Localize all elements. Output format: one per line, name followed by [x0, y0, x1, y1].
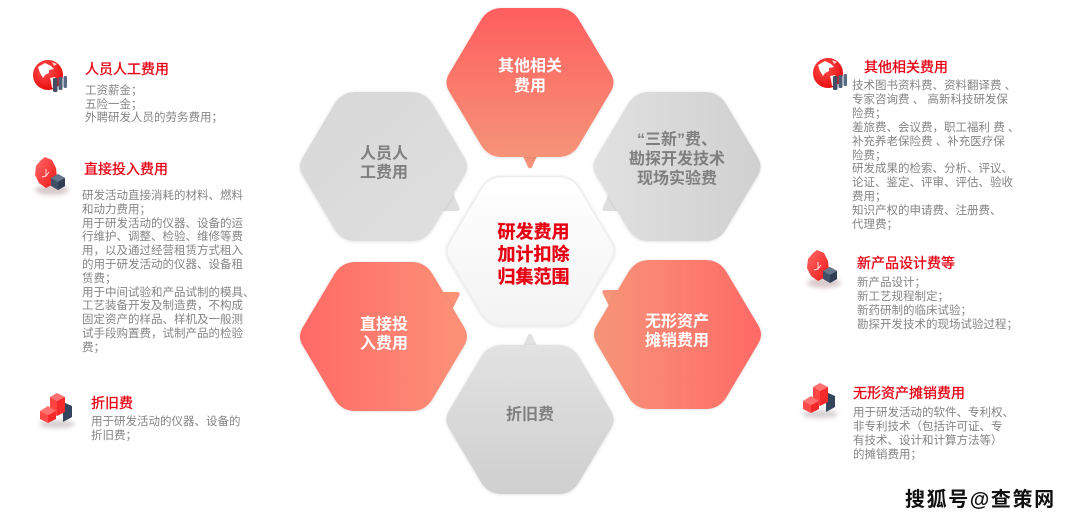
- hexagon: 人员人工费用: [300, 92, 467, 241]
- text block: 直接投入费用: 和动力费用；: [82, 204, 151, 216]
- text block: 人员人工费用: 人员人工费用: [85, 61, 169, 77]
- center hexagon: 研发费用加计扣除归集范围: 加计扣除: [498, 244, 570, 264]
- icon: globe right: [813, 58, 847, 90]
- hexagon: 其他相关费用: 费用: [514, 77, 546, 95]
- hexagon: 无形资产摊销费用: 摊销费用: [645, 330, 709, 350]
- center hexagon: 研发费用加计扣除归集范围: 归集范围: [498, 267, 570, 287]
- hexagon: 直接投入费用: [300, 262, 467, 411]
- text block: 人员人工费用: [85, 61, 223, 124]
- text block: 直接投入费用: 试手段购置费，试制产品的检验: [82, 328, 243, 340]
- text block: 其他相关费用: 其他相关费用: [864, 59, 948, 75]
- text block: 直接投入费用: 用于中间试验和产品试制的模具、: [82, 287, 254, 299]
- hexagon: 无形资产摊销费用: [594, 260, 761, 409]
- text block: 直接投入费用: 费；: [82, 342, 105, 354]
- text block: 新产品设计费等: 新产品设计费等: [857, 255, 955, 271]
- hexagon: 其他相关费用: [446, 8, 614, 168]
- hexagon: 折旧费: [446, 334, 614, 494]
- text block: 直接投入费用: 直接投入费用: [84, 161, 168, 177]
- hexagon: 折旧费: 折旧费: [506, 406, 554, 424]
- text block: 其他相关费用: 补充养老保险费 、补充医疗保: [852, 136, 1005, 148]
- text block: 直接投入费用: 赁费；: [82, 273, 116, 285]
- text block: 无形资产摊销费用: 无形资产摊销费用: [853, 385, 965, 401]
- text block: 直接投入费用: 行维护、调整、检验、维修等费: [82, 231, 243, 243]
- text block: 无形资产摊销费用: [853, 385, 1014, 461]
- text block: 人员人工费用: 工资薪金；: [85, 85, 142, 97]
- text block: 人员人工费用: 外聘研发人员的劳务费用；: [85, 112, 223, 124]
- text block: 无形资产摊销费用: 用于研发活动的软件、专利权、: [853, 407, 1014, 419]
- text block: 无形资产摊销费用: 的摊销费用；: [853, 449, 922, 461]
- text block: 折旧费: 折旧费: [91, 395, 133, 411]
- text block: 其他相关费用: 代理费；: [852, 219, 898, 231]
- text block: 折旧费: 折旧费；: [91, 430, 137, 442]
- icon: boxes left: [39, 393, 75, 428]
- text block: 人员人工费用: 五险一金；: [85, 98, 142, 110]
- text block: 新产品设计费等: 勘探开发技术的现场试验过程；: [857, 319, 1018, 331]
- text block: 其他相关费用: 专家咨询费 、 高新科技研发保: [852, 94, 1008, 106]
- center hexagon: 研发费用加计扣除归集范围: 研发费用: [498, 221, 570, 242]
- icon: globe left: [33, 60, 67, 92]
- hexagon: 三新费: 勘探开发技术: [629, 149, 725, 168]
- text block: 直接投入费用: 工艺装备开发及制造费，不构成: [82, 300, 243, 312]
- center hexagon: 研发费用加计扣除归集范围: [447, 176, 614, 326]
- text block: 无形资产摊销费用: 有技术、设计和计算方法等）: [853, 435, 1002, 447]
- text block: 新产品设计费等: 新产品设计；: [857, 277, 926, 289]
- text block: 其他相关费用: 差旅费、会议费，职工福利 费 、: [852, 122, 1019, 134]
- text block: 新产品设计费等: [857, 255, 1018, 331]
- hexagon: 人员人工费用: 人员人: [360, 146, 408, 162]
- text block: 新产品设计费等: 新药研制的临床试验；: [857, 305, 972, 317]
- hexagon: 三新费: “三新”费、: [637, 130, 717, 148]
- hexagon: 其他相关费用: 其他相关: [498, 56, 562, 75]
- hexagon: 直接投入费用: 直接投: [360, 314, 408, 334]
- text block: 其他相关费用: 论证、鉴定、评审、评估、验收: [852, 177, 1013, 189]
- hexagon: 三新费: 现场实验费: [637, 168, 717, 188]
- hexagon: 无形资产摊销费用: 无形资产: [645, 312, 709, 330]
- text block: 直接投入费用: [82, 161, 254, 354]
- hexagon: 人员人工费用: 工费用: [360, 164, 408, 182]
- icon: shield left: [35, 157, 69, 195]
- text block: 其他相关费用: 知识产权的申请费、注册费、: [852, 205, 1002, 217]
- text block: 无形资产摊销费用: 非专利技术（包括许可证、专: [853, 421, 1002, 433]
- icon: shield right: [807, 250, 841, 288]
- text block: 其他相关费用: 技术图书资料费、资料翻译费 、: [852, 80, 1016, 92]
- text block: 直接投入费用: 用于研发活动的仪器、设备的运: [82, 218, 243, 230]
- text block: 其他相关费用: 费用；: [852, 191, 886, 203]
- hexagon: 三新费: [594, 92, 760, 241]
- text block: 其他相关费用: 研发成果的检索、分析、评议、: [852, 163, 1013, 175]
- text block: 其他相关费用: 险费；: [852, 150, 886, 162]
- icon: boxes right: [802, 383, 838, 418]
- text block: 直接投入费用: 用，以及通过经营租赁方式租入: [82, 245, 243, 257]
- text block: 其他相关费用: 险费；: [852, 108, 886, 120]
- hexagon: 直接投入费用: 入费用: [360, 334, 408, 352]
- watermark: 搜狐号@查策网: [905, 489, 1056, 511]
- text block: 新产品设计费等: 新工艺规程制定；: [857, 291, 949, 303]
- text block: 直接投入费用: 固定资产的样品、样机及一般测: [82, 314, 243, 326]
- text block: 直接投入费用: 研发活动直接消耗的材料、燃料: [82, 190, 243, 202]
- text block: 折旧费: [91, 395, 240, 442]
- text block: 折旧费: 用于研发活动的仪器、设备的: [91, 416, 240, 428]
- text block: 其他相关费用: [852, 59, 1019, 231]
- text block: 直接投入费用: 的用于研发活动的仪器、设备租: [82, 259, 243, 271]
